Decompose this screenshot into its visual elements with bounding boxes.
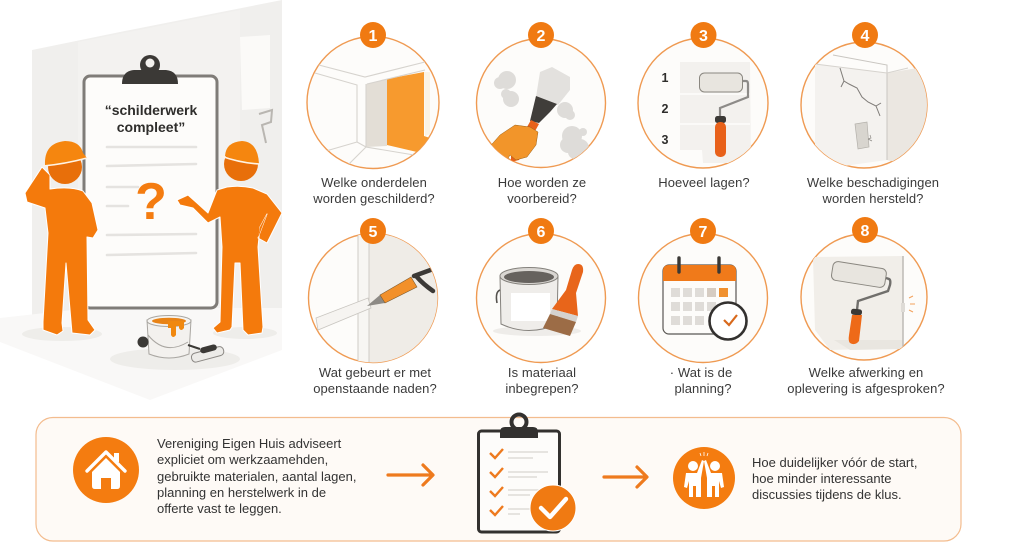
label 8: Welke afwerking en <box>809 365 923 380</box>
panel: question 2 <box>476 22 606 206</box>
panel: question 7 <box>638 218 768 396</box>
illustration: caulk gun on seam <box>316 233 439 363</box>
number badge 5: 5 <box>369 224 378 241</box>
illustration: scraper and damaged paint <box>492 67 589 162</box>
label 5: openstaande naden? <box>313 381 437 396</box>
icon: checklist clipboard <box>478 414 576 532</box>
worker right <box>177 141 282 335</box>
clipboard title: “schilderwerk <box>105 102 198 118</box>
clipboard clip <box>122 55 178 84</box>
label 6 <box>505 365 579 396</box>
number badge 7: 7 <box>699 224 708 241</box>
number badge 1 <box>360 22 386 48</box>
number badge 1: 1 <box>369 28 378 45</box>
number badge 8: 8 <box>861 223 870 240</box>
icon: two people high five <box>673 447 735 509</box>
closing text: hoe minder interessante <box>752 471 891 486</box>
panel: question 6 <box>476 218 606 396</box>
number badge 2 <box>528 22 554 48</box>
advice text: offerte vast te leggen. <box>157 501 282 516</box>
floor shadows <box>22 327 277 370</box>
closing text: discussies tijdens de klus. <box>752 487 902 502</box>
panel: bottom advice banner <box>36 414 961 541</box>
closing text <box>752 455 917 502</box>
icon: house <box>73 437 139 503</box>
label 5: Wat gebeurt er met <box>319 365 431 380</box>
clipboard lines <box>107 147 196 255</box>
number badge 7 <box>690 218 716 244</box>
label 6: inbegrepen? <box>505 381 579 396</box>
layer numbers <box>662 71 669 147</box>
panel: question 1 <box>307 22 439 206</box>
label 7 <box>670 365 732 396</box>
label 8: oplevering is afgesproken? <box>787 381 945 396</box>
label 4: worden hersteld? <box>821 191 924 206</box>
panel: question 4 <box>801 22 939 206</box>
label 6: Is materiaal <box>508 365 576 380</box>
illustration: calendar and clock <box>663 258 746 340</box>
layer numbers: 1 <box>662 71 669 85</box>
illustration: three coats with roller <box>662 62 751 163</box>
label 2: voorbereid? <box>507 191 577 206</box>
label 3: Hoeveel lagen? <box>658 175 750 190</box>
label 7: planning? <box>674 381 732 396</box>
illustration: roller finishing at door frame <box>813 256 915 350</box>
number badge 6 <box>528 218 554 244</box>
layer numbers: 3 <box>662 133 669 147</box>
label 5 <box>313 365 437 396</box>
advice text: planning en herstelwerk in de <box>157 485 326 500</box>
label 7: · Wat is de <box>670 365 732 380</box>
question mark: ? <box>135 173 167 231</box>
panel: question 8 <box>787 217 945 396</box>
panel: scene with clipboard and workers <box>0 0 282 400</box>
label 2: Hoe worden ze <box>498 175 586 190</box>
label 4 <box>807 175 939 206</box>
advice text <box>157 436 356 516</box>
label 1: Welke onderdelen <box>321 175 427 190</box>
clipboard <box>84 55 217 308</box>
painted wall patch with roller <box>240 35 272 143</box>
illustration: wall with crack and patch <box>815 55 930 170</box>
floor <box>0 308 282 400</box>
label 2 <box>498 175 586 206</box>
label 8 <box>787 365 945 396</box>
label 4: Welke beschadigingen <box>807 175 939 190</box>
number badge 2: 2 <box>537 28 546 45</box>
number badge 4 <box>852 22 878 48</box>
panel: question 5 <box>308 218 439 396</box>
illustration: paint can and brush <box>493 264 583 336</box>
clipboard: compleet” <box>117 119 185 135</box>
room wall <box>32 0 282 320</box>
advice text: Vereniging Eigen Huis adviseert <box>157 436 342 451</box>
arrow 1 <box>388 465 433 485</box>
panel: question 3 <box>638 22 768 190</box>
number badge 3 <box>690 22 716 48</box>
layer numbers: 2 <box>662 102 669 116</box>
number badge 5 <box>360 218 386 244</box>
advice text: gebruikte materialen, aantal lagen, <box>157 469 356 484</box>
number badge 3: 3 <box>699 28 708 45</box>
paint can with roller <box>138 316 225 363</box>
closing text: Hoe duidelijker vóór de start, <box>752 455 917 470</box>
number badge 8 <box>852 217 878 243</box>
illustration: room corner with orange wall <box>315 62 430 168</box>
number badge 6: 6 <box>537 224 546 241</box>
worker left <box>25 141 98 335</box>
arrow 2 <box>604 467 647 487</box>
advice text: expliciet om werkzaamehden, <box>157 452 328 467</box>
label 1 <box>312 175 435 206</box>
number badge 4: 4 <box>861 28 870 45</box>
label 1: worden geschilderd? <box>312 191 435 206</box>
